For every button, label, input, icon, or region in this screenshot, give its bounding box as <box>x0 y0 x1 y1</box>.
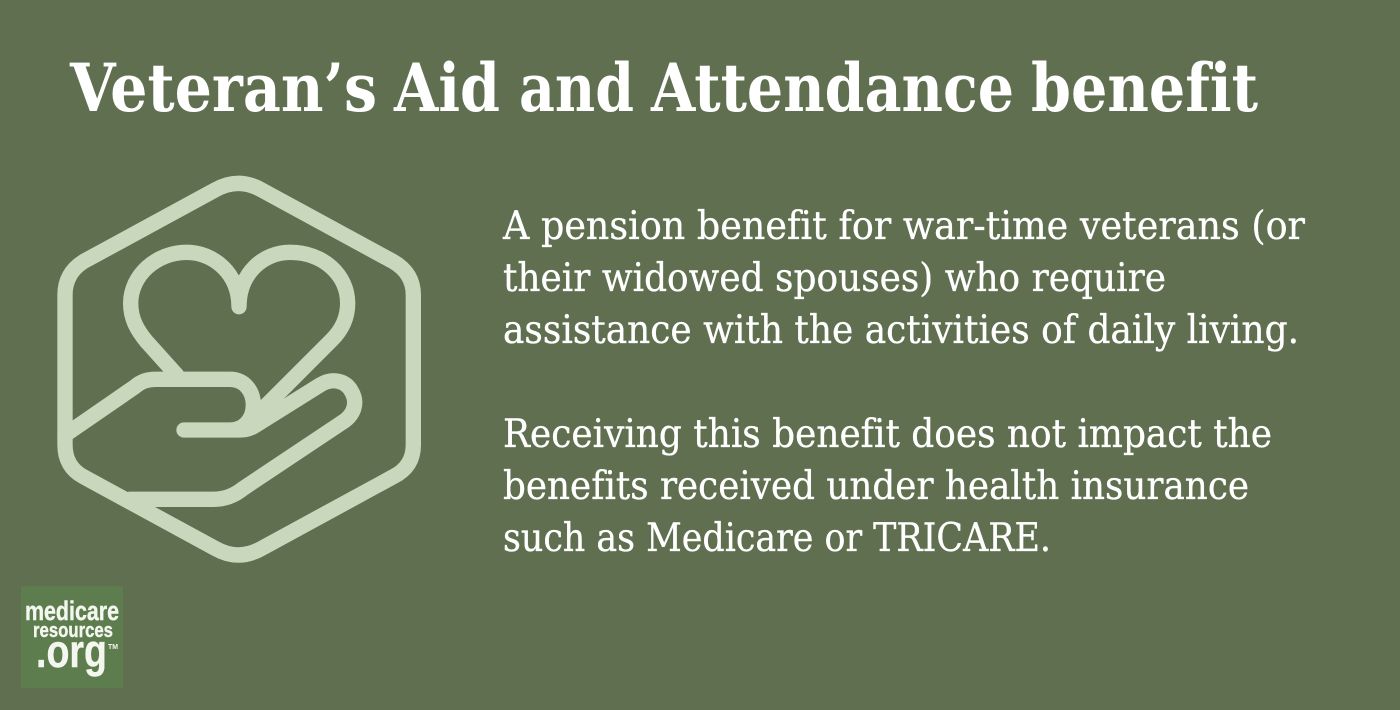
logo: medicareresources.org <box>21 586 123 688</box>
hand <box>65 379 355 499</box>
paragraph: no impact on health insurance: such as Medicare or TRICARE. <box>503 516 1051 561</box>
paragraph: pension description: their widowed spouses) who require <box>503 256 1166 301</box>
icon: hand holding heart in hexagon <box>65 183 413 555</box>
paragraph: no impact on health insurance: benefits received under health insurance <box>503 464 1249 509</box>
paragraph: pension description: assistance with the activities of daily living. <box>503 308 1299 353</box>
logo: medicareresources.org: TM <box>108 644 118 651</box>
logo: medicareresources.org: .org <box>36 625 107 677</box>
heart <box>131 252 348 412</box>
paragraph: no impact on health insurance: Receiving this benefit does not impact the <box>503 412 1272 457</box>
paragraph: no impact on health insurance <box>503 412 1272 561</box>
title: benefit <box>1031 49 1258 127</box>
title: Aid <box>393 49 500 127</box>
logo: medicareresources.org: resources <box>33 620 113 642</box>
paragraph: pension description: A pension benefit for war-time veterans (or <box>502 204 1305 249</box>
title: Attendance <box>650 49 1014 127</box>
hexagon outline <box>65 183 413 555</box>
logo: medicareresources.org: medicare <box>25 596 119 626</box>
title: Veteran’s <box>69 49 377 127</box>
paragraph: pension description <box>502 204 1305 353</box>
title: and <box>519 49 634 127</box>
title <box>69 49 1258 127</box>
